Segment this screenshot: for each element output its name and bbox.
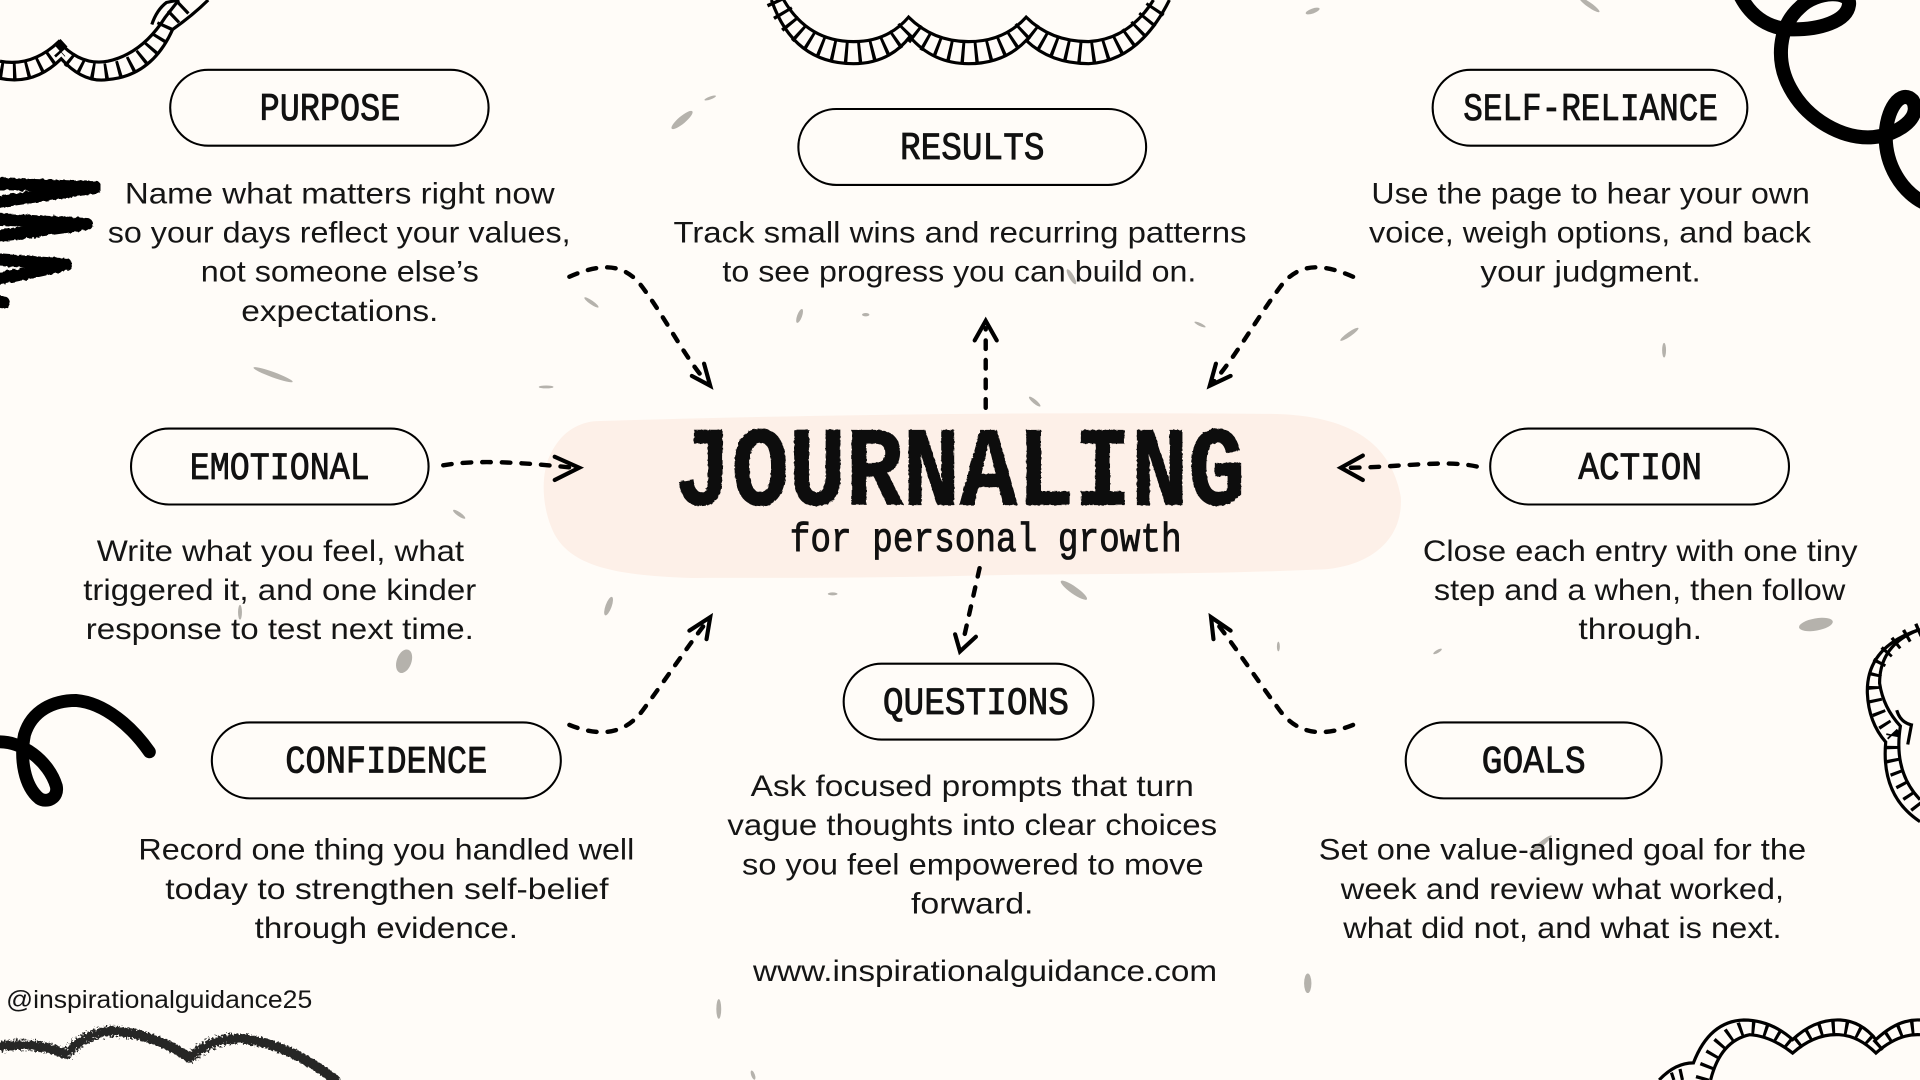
text: questions description: vague thoughts into clear choices — [727, 809, 1217, 842]
panel: results — [673, 109, 1247, 289]
panel: emotional — [83, 429, 476, 646]
arrow: results to title — [975, 321, 997, 408]
heading pill: goals — [1406, 722, 1662, 798]
text: questions description: forward. — [911, 887, 1033, 920]
text: self-reliance description: Use the page to hear your own — [1371, 177, 1810, 210]
decoration: bottom-left crayon stroke — [0, 1031, 336, 1080]
heading pill: emotional — [131, 429, 429, 504]
heading pill: action: ACTION — [1578, 446, 1702, 491]
text: results description: to see progress you can build on. — [722, 256, 1196, 289]
panel: purpose — [108, 70, 571, 328]
text: action description — [1423, 535, 1858, 646]
decoration: left black curl — [0, 700, 149, 800]
heading pill: results: RESULTS — [900, 126, 1044, 171]
text: purpose description: expectations. — [241, 295, 438, 328]
text: purpose description: not someone else’s — [201, 256, 479, 289]
text: purpose description — [108, 177, 571, 328]
heading pill: questions: QUESTIONS — [883, 681, 1069, 726]
text: self-reliance description: voice, weigh options, and back — [1369, 216, 1812, 249]
heading pill: emotional: EMOTIONAL — [190, 446, 370, 491]
text: confidence description — [138, 834, 634, 945]
text: results description: Track small wins and recurring patterns — [673, 216, 1247, 249]
text: questions description: so you feel empowered to move — [742, 848, 1204, 881]
text: purpose description: so your days reflect your values, — [108, 216, 571, 249]
heading pill: goals: GOALS — [1482, 740, 1586, 785]
text: emotional description: response to test next time. — [86, 613, 474, 646]
arrow: action to title — [1341, 456, 1477, 480]
title: JOURNALING — [675, 410, 1245, 538]
text: emotional description — [83, 535, 476, 646]
text: self-reliance description — [1369, 177, 1812, 289]
text: action description: Close each entry with one tiny — [1423, 535, 1858, 568]
text: goals description: Set one value-aligned goal for the — [1319, 834, 1806, 867]
panel: action — [1423, 429, 1858, 646]
text: emotional description: Write what you feel, what — [97, 535, 465, 568]
text: questions description: Ask focused prompts that turn — [751, 770, 1194, 803]
heading pill: confidence: CONFIDENCE — [285, 740, 487, 785]
decoration: right hatched cloud — [1867, 629, 1920, 822]
text: results description — [673, 216, 1247, 289]
text: goals description — [1319, 834, 1806, 945]
text: purpose description: Name what matters right now — [125, 177, 555, 210]
text: confidence description: Record one thing you handled well — [138, 834, 634, 867]
arrow: goals to title — [1211, 617, 1353, 732]
text: goals description: what did not, and what is next. — [1342, 912, 1782, 945]
subtitle: for personal growth — [790, 518, 1182, 564]
text: emotional description: triggered it, and one kinder — [83, 574, 476, 607]
text: confidence description: today to strengthen self-belief — [165, 873, 609, 906]
panel: confidence — [138, 722, 634, 945]
decoration: top-left hatched cloud — [0, 0, 208, 80]
decoration: top-centre hatched cloud — [771, 0, 1169, 64]
heading pill: self-reliance — [1433, 70, 1747, 146]
text: action description: step and a when, then follow — [1434, 574, 1846, 607]
heading pill: self-reliance: SELF-RELIANCE — [1463, 87, 1718, 132]
text: confidence description: through evidence. — [255, 912, 518, 945]
website url: www.inspirationalguidance.com — [752, 955, 1217, 988]
panel: self-reliance — [1369, 70, 1812, 289]
social handle: @inspirationalguidance25 — [6, 986, 312, 1014]
text: self-reliance description: your judgment. — [1480, 256, 1701, 289]
heading pill: purpose: PURPOSE — [260, 87, 400, 132]
arrow: emotional to title — [443, 457, 579, 480]
arrow: confidence to title — [569, 617, 710, 732]
heading pill: action — [1490, 429, 1789, 504]
arrow: purpose to title — [569, 267, 710, 386]
text: action description: through. — [1578, 613, 1702, 646]
text: goals description: week and review what worked, — [1340, 873, 1784, 906]
text: questions description — [727, 770, 1217, 920]
heading pill: questions — [844, 664, 1093, 740]
decoration: left black scribble — [0, 184, 96, 302]
decoration: top-right black swirl — [1740, 0, 1920, 203]
heading pill: results — [798, 109, 1146, 185]
heading pill: purpose — [170, 70, 489, 146]
arrow: title to questions — [955, 568, 980, 651]
panel: questions — [727, 664, 1217, 920]
heading pill: confidence — [212, 722, 561, 798]
arrow: self-reliance to title — [1210, 267, 1353, 386]
decoration: bottom-right hatched cloud — [1659, 1020, 1920, 1080]
panel: goals — [1319, 722, 1806, 945]
central blob — [544, 413, 1401, 578]
